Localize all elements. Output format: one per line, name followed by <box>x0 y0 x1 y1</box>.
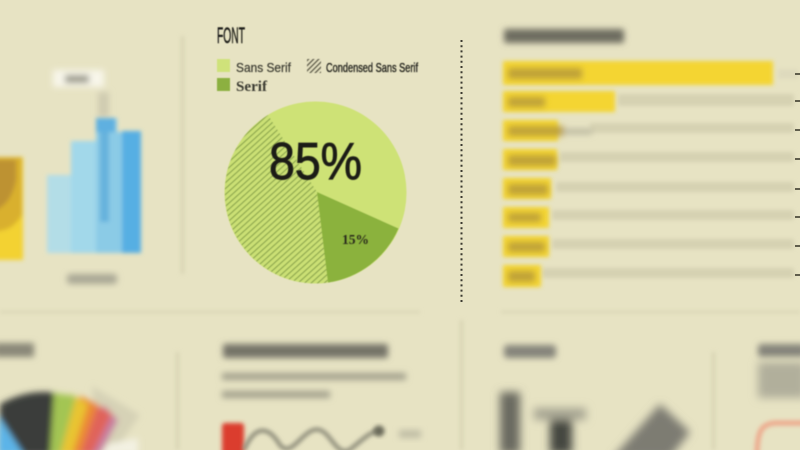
heading placeholder <box>223 344 388 358</box>
dark shapes <box>500 392 690 450</box>
slice: sans serif <box>224 102 406 284</box>
pie chart <box>224 102 406 284</box>
panel: blurred yellow chart at left edge <box>0 157 23 260</box>
callout: bar chart value label <box>53 70 109 118</box>
wave line <box>244 430 378 450</box>
legend: serif <box>217 78 267 95</box>
bar chart axis label <box>67 274 117 284</box>
legend <box>217 59 418 95</box>
dotted divider <box>460 40 462 304</box>
panel: font pie chart: FONT <box>217 23 245 48</box>
panel: blurred colour fan, bottom left <box>0 343 140 450</box>
slice: condensed sans serif <box>225 115 328 283</box>
bar tracks <box>542 69 798 278</box>
bars <box>47 118 141 253</box>
value: 15%: 15% <box>342 232 369 247</box>
heading placeholder <box>758 344 800 357</box>
legend: sans serif: Sans Serif <box>236 60 291 75</box>
blurred bar labels <box>508 68 592 282</box>
heading placeholder <box>504 345 556 358</box>
panel: blurred section at right edge <box>757 344 800 450</box>
red marker <box>222 423 244 450</box>
panel: blurred section with dark shapes <box>500 345 690 450</box>
tick marks <box>795 73 800 276</box>
legend: condensed sans serif <box>307 59 418 75</box>
panel: font pie chart <box>217 23 418 284</box>
value: 85%: 85% <box>269 133 362 191</box>
heading placeholder <box>0 343 34 357</box>
legend: condensed sans serif: Condensed Sans Serif <box>326 60 418 75</box>
slice: serif <box>317 192 398 283</box>
yellow bars <box>503 61 773 287</box>
colour fan <box>0 386 140 450</box>
legend: sans serif <box>217 59 291 75</box>
orange outline shape <box>757 423 800 450</box>
legend: serif: Serif <box>236 79 267 95</box>
end label placeholder <box>399 430 421 438</box>
heading placeholder <box>504 29 624 43</box>
panel: blurred line chart section <box>222 344 421 450</box>
panel: horizontal bar chart <box>503 29 800 287</box>
description placeholder <box>222 373 406 398</box>
panel: blurred blue bar chart <box>47 70 141 284</box>
end point <box>374 426 384 436</box>
text placeholder <box>758 362 800 398</box>
